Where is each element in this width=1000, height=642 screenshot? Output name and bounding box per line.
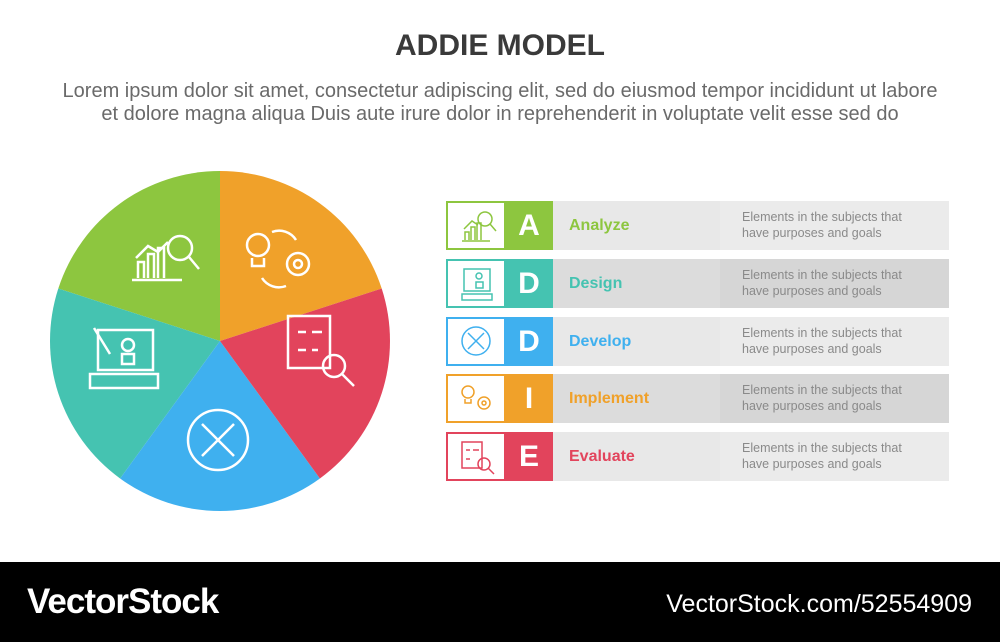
icon: evaluate	[446, 432, 506, 481]
row: evaluate: E	[519, 440, 539, 473]
row: analyze: Elements in the subjects that have purposes and goals	[742, 210, 902, 240]
icon: design	[446, 259, 506, 308]
row: design	[446, 259, 949, 308]
icon: implement	[446, 374, 506, 423]
slice: design	[50, 288, 220, 478]
slice: implement	[220, 171, 382, 341]
row: analyze	[446, 201, 949, 250]
row: evaluate: Evaluate	[569, 448, 635, 465]
icon: analyze	[446, 201, 506, 250]
row: implement: Elements in the subjects that have purposes and goals	[742, 383, 902, 413]
row: develop: Elements in the subjects that have purposes and goals	[742, 326, 902, 356]
row: develop	[446, 317, 949, 366]
icon: develop	[446, 317, 506, 366]
slice: develop	[120, 341, 320, 511]
row: design: Elements in the subjects that have purposes and goals	[742, 268, 902, 298]
subtitle: Lorem ipsum dolor sit amet, consectetur adipiscing elit, sed do eiusmod tempor incididunt ut labore	[63, 80, 937, 102]
row: analyze: Analyze	[569, 217, 629, 234]
footer logo: VectorStock	[27, 582, 218, 621]
pie chart	[50, 171, 390, 511]
title: ADDIE MODEL	[395, 29, 605, 62]
row: design: D	[518, 267, 540, 300]
row: implement: Implement	[569, 390, 649, 407]
row: design: Design	[569, 275, 622, 292]
footer bar	[0, 562, 1000, 642]
slice: evaluate	[220, 288, 390, 478]
slice: analyze	[58, 171, 220, 341]
row: evaluate	[446, 432, 949, 481]
row: develop: Develop	[569, 333, 631, 350]
footer url: VectorStock.com/52554909	[666, 590, 972, 618]
row: implement	[446, 374, 949, 423]
row: implement: I	[525, 382, 533, 415]
subtitle: et dolore magna aliqua Duis aute irure dolor in reprehenderit in voluptate velit esse sed do	[101, 103, 899, 125]
row: analyze: A	[518, 209, 540, 242]
row: evaluate: Elements in the subjects that have purposes and goals	[742, 441, 902, 471]
row: develop: D	[518, 325, 540, 358]
subtitle	[63, 80, 937, 125]
